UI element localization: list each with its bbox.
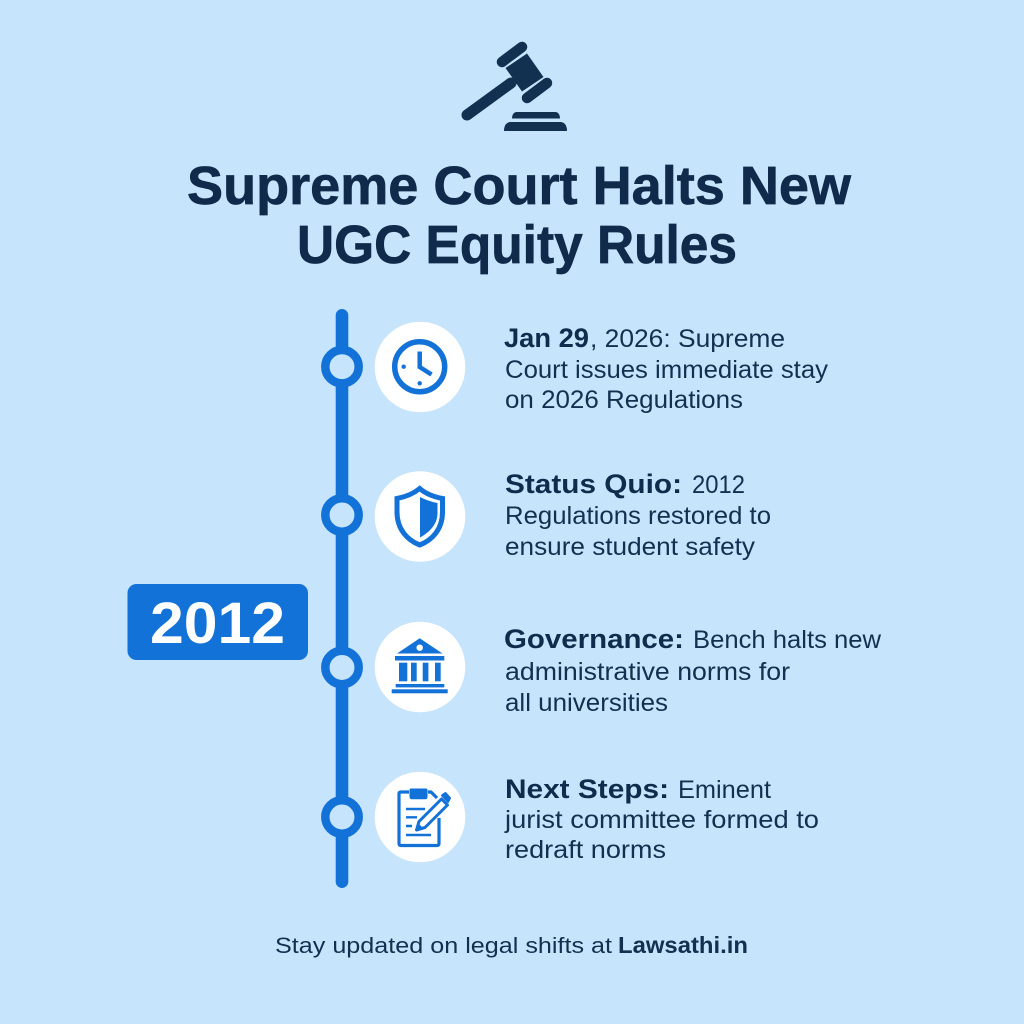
footer: Lawsathi.in [618,932,748,958]
text block: Governance: Governance: [504,624,684,654]
text block: Governance: administrative norms for [505,658,790,686]
timeline node 4 [325,800,359,834]
text block: Governance: all universities [505,689,668,717]
text block: Jan 29 [504,323,828,414]
timeline node 3 [325,651,359,684]
title [187,156,852,275]
text block: Jan 29: , 2026: Supreme [590,325,785,353]
title: UGC Equity Rules [297,215,737,275]
text block: Next Steps [504,774,819,864]
text block: Next Steps: jurist committee formed to [504,806,819,834]
text block: Status Quio: ensure student safety [505,533,756,561]
text block: Jan 29: on 2026 Regulations [505,386,743,414]
timeline node 2 [325,498,359,532]
text block: Status Quio [505,469,771,561]
title: Supreme Court Halts New [187,156,852,216]
text block: Governance: Bench halts new [693,626,882,654]
year badge [128,584,308,660]
text block: Governance [504,624,882,717]
icon: gavel [467,47,567,131]
text block: Status Quio: Regulations restored to [505,502,771,530]
footer [275,932,748,958]
text block: Status Quio: Status Quio: [505,469,682,499]
year badge: 2012 [150,591,285,656]
text block: Jan 29: Court issues immediate stay [505,356,828,384]
footer: Stay updated on legal shifts at [275,933,612,958]
text block: Next Steps: Next Steps: [505,774,669,804]
text block: Next Steps: redraft norms [505,836,666,864]
text block: Status Quio: 2012 [692,471,745,499]
timeline node 1 [325,350,359,383]
text block: Next Steps: Eminent [678,776,771,804]
icon: clock [375,322,465,412]
icon: shield [375,471,465,562]
text block: Jan 29: Jan 29 [504,323,589,353]
icon: clipboard with pen [375,772,465,862]
timeline [325,309,359,888]
icon: institution building [375,622,465,712]
